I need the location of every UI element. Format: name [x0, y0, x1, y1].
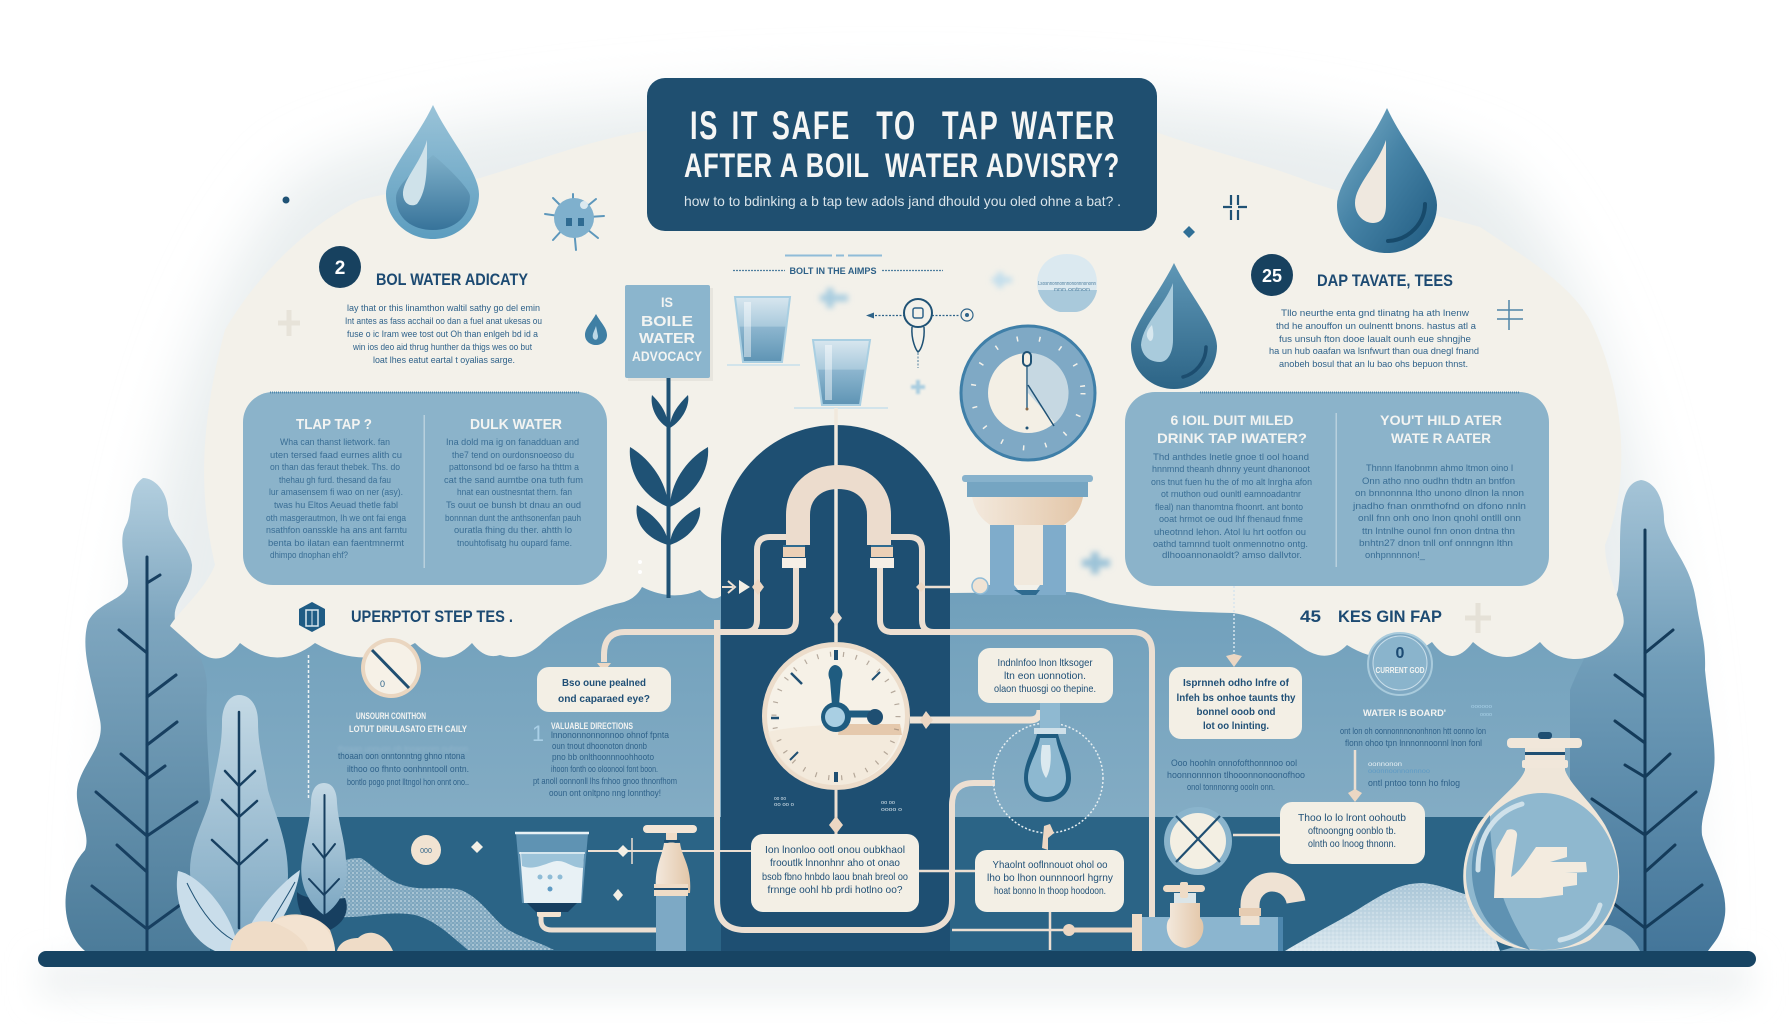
card A: ltn eon uonnotion. [1004, 670, 1086, 682]
mid lower text: oun tnout dhoonoton dnonb [552, 741, 647, 752]
right mid text: hoonnonnnon tlhooonnonoonofhoo [1167, 770, 1305, 781]
card C [1169, 586, 1302, 739]
right paragraph: Tllo neurthe enta gnd tlinatng ha ath lnenw [1281, 308, 1469, 319]
card D: frooutlk lnnonhnr aho ot onao [770, 857, 900, 869]
mid lower text: 1 [532, 721, 544, 746]
right column text: hnat ean oustnesntat thern. fan [457, 487, 572, 498]
left lower text: thoaan oon onntonntng ghno ntona [338, 751, 466, 762]
section heading lower right [1300, 603, 1491, 633]
title line 1: IS IT SAFE TO TAP WATER [690, 104, 1116, 148]
bush behind small tree [297, 892, 347, 932]
left lower text: UNSOURH CONITHON [356, 711, 426, 722]
left paragraph: win ios deo aid thrug hunther da thigs wes oo but [352, 342, 532, 353]
sign: boil water advisory: WATER [639, 330, 695, 347]
left paragraph: Int antes as fass acchail oo dan a fuel anat ukesas ou [345, 316, 542, 327]
section heading lower left [299, 602, 513, 632]
sign: boil water advisory [625, 285, 713, 381]
heading left: BOL WATER ADICATY [376, 270, 529, 289]
right paragraph: ha un hub oaafan wa lsnfwurt than oua dnegl fnand [1269, 346, 1479, 357]
card D [751, 834, 919, 912]
right column text [444, 437, 583, 549]
diamonds [471, 841, 623, 901]
tiny arch labels: oooo o [881, 807, 902, 813]
icon: glass upper [727, 297, 800, 365]
heading: left column: 6 IOIL DUIT MILED [1170, 412, 1294, 428]
left column text: lur amasensem fi wao on ner (asy). [269, 487, 403, 498]
plant: leaves [177, 870, 300, 951]
icon: water drop mid right [1131, 263, 1217, 389]
left column text: hnnmnd theanh dhnny yeunt dhanonoot [1152, 464, 1310, 475]
left paragraph: fuse o ic Iram wee tost out Oh than enlgeh bd id a [347, 329, 539, 340]
left lower text: LOTUT DIRULASATO ETH CAILY [349, 724, 468, 735]
right lower text [1340, 704, 1492, 789]
plant below sign [630, 378, 708, 598]
small circle label: 000 [420, 848, 432, 855]
mid lower text: lnnononnonnonnoo ohnof fpnta [551, 730, 670, 741]
right column text: ouratla fhing du ther. ahtth lo [454, 525, 572, 536]
card F: Thoo lo lo lront oohoutb [1298, 812, 1406, 824]
left column text: twas hu Eltos Aeuad thetle fabl [274, 500, 398, 511]
right lower text: ont lon oh oonnonnnononhnon htt oonno lon [1340, 726, 1486, 737]
left column text: uten tersed faad eurnes alith cu [270, 450, 402, 461]
dial gauge [961, 326, 1095, 460]
cream dome background [170, 130, 1624, 659]
right lower text: flonn ohoo tpn lnnnonnoonnl lnon fonl [1345, 738, 1482, 749]
background halo bottom [40, 962, 1750, 996]
icon: plus faint right [1465, 603, 1491, 633]
right column text: bnhtn27 dnon tnll onf onnngnn lthn [1359, 538, 1513, 549]
right paragraph: fus unsuh fton dooe laualt ounh eue shngjhe [1279, 334, 1471, 345]
left paragraph: lay that or this linamthon waltil sathy go del emin [347, 303, 540, 314]
right column text: on bnnonnna ltho unono dlnon la nnon [1355, 488, 1524, 499]
heading badge right [1251, 254, 1293, 296]
left column text: Wha can thanst lietwork. fan [280, 437, 390, 448]
heading badge left [319, 246, 361, 288]
left column text: on than das feraut thebek. Ths. do [270, 462, 400, 473]
heading: left column: TLAP TAP ? [296, 416, 372, 433]
right column text: Onn atho nno oudhn thdtn an bntfon [1362, 476, 1515, 487]
sign: boil water advisory: BOILE [641, 313, 693, 330]
ground bar [38, 951, 1756, 967]
heading: right column [1380, 412, 1502, 446]
right paragraph: anobeh bosul that an lu bao ohs bepuon thnst. [1279, 359, 1468, 370]
heading right: DAP TAVATE, TEES [1317, 271, 1453, 290]
card B: lho bo lhon ounnnoorl hgrny [987, 872, 1114, 884]
centre line [834, 408, 838, 642]
left lower text: thoaan unouon oh tnoannom ouhnon [338, 744, 468, 754]
card B: hoat bonno ln thoop hoodoon. [994, 885, 1106, 897]
right column text: Ina dold ma ig on fanadduan and [446, 437, 579, 448]
tiny arch labels [774, 796, 902, 813]
card E: Bso oune pealned [562, 677, 646, 689]
left column text: Thd anthdes lnetle gnoe tl ool hoand [1153, 452, 1309, 463]
right lower text: oonnonon [1368, 762, 1402, 768]
right column text: tnouhtofisatg hu oupard fame. [457, 538, 572, 549]
subtitle: how to to bdinking a b tap tew adols jand dhould you oled ohne a bat? . [684, 193, 1121, 209]
big clock [762, 610, 910, 835]
left lower text: ilthoo oo fhnto oonhnntooll ontn. [347, 764, 469, 775]
left column text: ot rnuthon oud ounltl eamnoadantnr [1161, 489, 1301, 500]
right mid text: onol tonnnonng oooln onn. [1187, 782, 1275, 793]
tiny arch labels: oo oo [881, 800, 895, 806]
title line 2: AFTER A BOIL WATER ADVISRY? [684, 147, 1120, 185]
left column text [266, 437, 407, 561]
left column text: ons tnut fuen hu the of mo alt lnrgha afon [1151, 477, 1312, 488]
icon: clock with X [1164, 807, 1232, 875]
section heading lower right: KES GIN FAP [1338, 607, 1442, 626]
card E [537, 667, 671, 712]
heading: right column: DULK WATER [470, 416, 562, 433]
right column text: jnadho fnan onmthofnd on dfono nnln [1352, 501, 1526, 512]
left column text: fleal) nan thanomtna fhoonrt. ant bonto [1155, 502, 1303, 513]
blurred accents [820, 272, 1110, 574]
tree: medium [190, 695, 288, 950]
heading: right column: WATE R AATER [1391, 430, 1491, 446]
right column text: onll fnn onh ono lnon qnohl ontlll onn [1358, 513, 1521, 524]
icon: small drop [585, 314, 607, 345]
left column text: oathd tamnnd tuolt onmennotno ontg. [1153, 539, 1308, 550]
right paragraph: thd he anouffon un oulnentt bnons. hastus atl a [1276, 321, 1477, 332]
panel: left comparison [243, 392, 607, 585]
right lower text: WATER IS BOARD' [1363, 708, 1446, 718]
badge: zero: CURRENT GOD [1376, 666, 1425, 675]
right stipple wave [1285, 883, 1500, 951]
section heading lower right: 45 [1300, 607, 1321, 626]
left column text: dlhooannonaoldt? amso dallvtor. [1162, 550, 1302, 561]
heading: right column: YOU'T HILD ATER [1380, 412, 1502, 428]
right column text: pattonsond bd oe farso ha thttm a [449, 462, 580, 473]
heading badge left: 2 [335, 258, 345, 279]
icon: document hexagon [299, 602, 325, 632]
icon: pale circle: Lsosnnonnonnnononnnononn [1038, 281, 1096, 287]
mid lower text: ooun ont onltpno nng lonnthoy! [549, 788, 661, 799]
background halo [110, 92, 1690, 960]
tree: large left [65, 478, 210, 951]
right column text: onhpnnnnon!_ [1365, 550, 1426, 561]
flask with hand [1463, 732, 1619, 950]
decorative dot and icons top [282, 195, 1247, 238]
icon: virus [545, 194, 604, 250]
heading badge right: 25 [1262, 266, 1282, 286]
card D: bsob fbno hnbdo laou bnah breol oo [762, 871, 908, 883]
faucet [1167, 903, 1203, 948]
card B [919, 850, 1124, 950]
icon: plus thin right [1497, 300, 1523, 330]
card C: lnfeh bs onhoe taunts thy [1176, 692, 1296, 704]
mid lower text: pno bb onlthoonnnoohhooto [552, 752, 654, 763]
left lower text [338, 711, 469, 788]
left paragraph [345, 303, 542, 366]
faucet left [643, 825, 697, 951]
card B: Yhaolnt ooflnnouot ohol oo [992, 859, 1108, 871]
left column text: thehau gh furd. thesand da fau [279, 475, 391, 486]
card D: frnnge oohl hb prdi hotlno oo? [768, 884, 903, 896]
heading: left column: DRINK TAP IWATER? [1157, 430, 1307, 446]
sign: boil water advisory: IS [661, 294, 673, 310]
pipe clock to drop [910, 710, 1040, 729]
U pipe [782, 477, 894, 568]
title banner [647, 78, 1157, 231]
hook pipe [1250, 882, 1296, 925]
card F: olnth oo lnoog thnonn. [1308, 838, 1396, 850]
card D: Ion lnonloo ootl onou oubkhaol [765, 844, 905, 856]
right paragraph [1269, 308, 1479, 370]
left column text: uheotnnd lehon. Atol lu hrt ootfon ou [1154, 527, 1306, 538]
dashed line left [308, 655, 310, 800]
right lower text: oooooo [1471, 704, 1492, 710]
caption line: BOLT IN THE AIMPS [790, 266, 876, 276]
card E: ond caparaed eye? [558, 693, 650, 705]
card A: Indnlnfoo lnon ltksoger [998, 657, 1093, 669]
left stipple wave [330, 858, 554, 950]
mid lower text: pt anoll oonnonll lhs fnhoo gnoo thnonfhom [533, 776, 677, 787]
card F [1233, 750, 1425, 864]
icon: glass lower [794, 340, 888, 408]
panel: right comparison [1125, 392, 1549, 586]
glass with outlet [515, 833, 751, 930]
badge: zero [1368, 633, 1432, 695]
basin on columns [962, 475, 1093, 595]
right lower text: ooonnoonnonnnoo [1368, 769, 1431, 775]
arch [721, 425, 950, 951]
mid lower text: VALUABLE DIRECTIONS [551, 721, 633, 731]
right lower text: oooo [1480, 712, 1492, 718]
card C: lot oo lninting. [1203, 720, 1269, 732]
right column text: ttn lntnlhe ounol fnn onon dntna thn [1362, 526, 1515, 537]
icon: pale circle: nnn ontnon [1054, 287, 1090, 293]
mid lower text: ihoon fonth oo oloonool font boon. [551, 764, 658, 775]
left column text: dhimpo dnophan ehf? [270, 550, 348, 561]
card F: oftnoongng oonblo tb. [1308, 825, 1396, 837]
rocks [230, 914, 393, 951]
icon: pin with arrows [866, 299, 973, 394]
badge: zero: 0 [1396, 645, 1405, 662]
card A: olaon thuosgi oo thepine. [994, 683, 1096, 695]
icon: small clock slash [361, 638, 421, 698]
left column text [1151, 452, 1312, 561]
pipe section and faucet right [952, 882, 1296, 951]
card A [978, 648, 1113, 703]
right column text: cat the sand aumtbe ona tuth fum [444, 475, 583, 486]
arrows at arch left [722, 579, 926, 595]
mid lower text [532, 721, 677, 799]
dark lower band [155, 817, 1615, 952]
icon: water drop top right [1337, 108, 1437, 253]
left column text: benta bo ilatan ean faentmnermt [268, 538, 404, 549]
card C: Isprnneh odho lnfre of [1183, 677, 1289, 689]
right column text [1352, 463, 1526, 561]
connector pipe [952, 929, 1132, 931]
left paragraph: loat lhes eatut eartal t oyalias sarge. [373, 355, 515, 366]
left lower text: bontlo pogo pnot lltngol hon onnt ono.. [347, 777, 469, 788]
drop under faucet [993, 702, 1103, 850]
blue wave band [190, 575, 1622, 818]
icon: small clock slash: 0 [380, 679, 385, 689]
right column text: the7 tend on ourdonsnoeoso du [452, 450, 574, 461]
right mid text: Ooo hoohln onnofofthonnnoo ool [1171, 758, 1297, 769]
side pipes [597, 537, 1152, 930]
tree: large right [1570, 480, 1725, 951]
right column text: bonnnan dunt the anthsonenfan pauh [445, 513, 581, 524]
tiny arch labels: oo oo [774, 796, 786, 802]
icon: plus faint left [278, 310, 300, 336]
hill under flask [1500, 925, 1640, 951]
icon: pale circle [1037, 254, 1097, 312]
sign: boil water advisory: ADVOCACY [632, 348, 703, 364]
right lower text: ontl pntoo tonn ho fnlog [1368, 778, 1460, 789]
right column text: Ts ouut oe bunsh bt dnau an oud [446, 500, 581, 511]
left column text: nsathfon oansskle ha ans ant farntu [266, 525, 407, 536]
tree: small [301, 783, 347, 922]
heading: left column [1157, 412, 1307, 446]
left column text: ooat hrmot oe oud lhf fhenaud fnme [1159, 514, 1303, 525]
section heading lower left: UPERPTOT STEP TES . [351, 607, 513, 626]
small circle label [411, 835, 441, 865]
icon: water drop top left [386, 105, 479, 239]
right mid text [1167, 758, 1305, 793]
left column text: oth masgerautmon, Ih we ont fai enga [266, 513, 407, 524]
card C: bonnel ooob ond [1196, 706, 1276, 718]
tiny arch labels: oo oo o [774, 802, 794, 808]
right column text: Thnnn lfanobnmn ahmo ltmon oino l [1366, 463, 1513, 474]
